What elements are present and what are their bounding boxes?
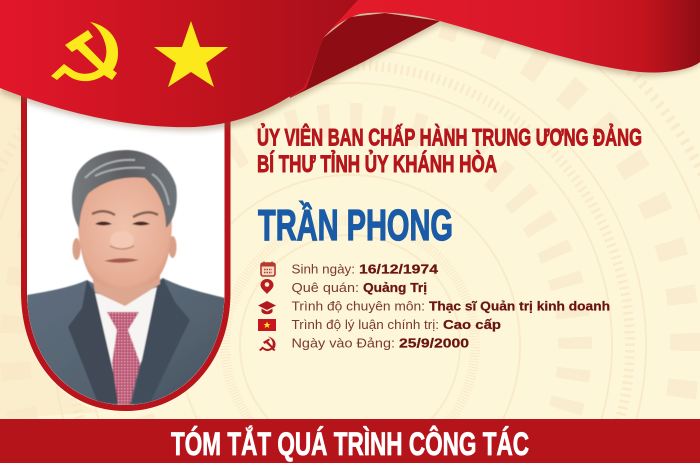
row: professional degree: Thạc sĩ Quản trị kinh doanh [429,298,610,314]
row: home town [292,280,427,295]
row: party entry date [292,336,469,350]
heading: position titles [257,122,642,178]
row: political theory: Trình độ lý luận chính trị: [292,317,439,332]
row: birth date: Sinh ngày: [292,262,355,276]
bottom banner [0,419,700,463]
portrait frame with photo [24,90,228,408]
left paper tint [0,90,100,419]
icon: graduation cap [258,301,276,314]
row: home town: Quê quán: [292,280,359,295]
row: political theory: Cao cấp [443,317,501,332]
row: professional degree [292,298,610,314]
hair [72,150,177,228]
banner title: TÓM TẮT QUÁ TRÌNH CÔNG TÁC [171,426,529,462]
icon: small hammer and sickle [259,336,276,351]
icon: hammer and sickle [51,22,118,81]
row: political theory [292,317,501,332]
row: party entry date: 25/9/2000 [399,336,469,350]
icon: yellow star [154,21,228,87]
neck [92,275,161,306]
mouth [104,258,139,263]
dark fold [290,13,440,98]
shirt [94,286,158,372]
main flag [0,0,360,127]
brows and eyes [92,211,158,217]
icon: map pin [260,279,274,294]
row: party entry date: Ngày vào Đảng: [292,336,395,350]
portrait photo [27,149,224,405]
icon: Vietnam flag [258,319,276,331]
nose [110,231,134,249]
row: birth date [292,262,439,276]
heading: name: TRẦN PHONG [258,200,453,250]
row: professional degree: Trình độ chuyên môn: [292,298,425,314]
hair highlights [85,160,169,205]
ears [72,238,80,260]
row: home town: Quảng Trị [363,280,427,295]
right lapel [132,278,190,403]
icon: calendar [261,262,275,276]
shadow under banner [0,0,700,131]
left lapel [68,280,118,403]
bright sliver [280,38,323,98]
second ribbon [323,0,700,73]
info list [258,262,610,351]
red flag banner [0,0,700,131]
suit jacket [27,278,225,405]
face [78,169,172,289]
heading: position titles: BÍ THƯ TỈNH ỦY KHÁNH HÒA [257,149,497,178]
row: birth date: 16/12/1974 [359,262,439,276]
tie [107,312,140,404]
